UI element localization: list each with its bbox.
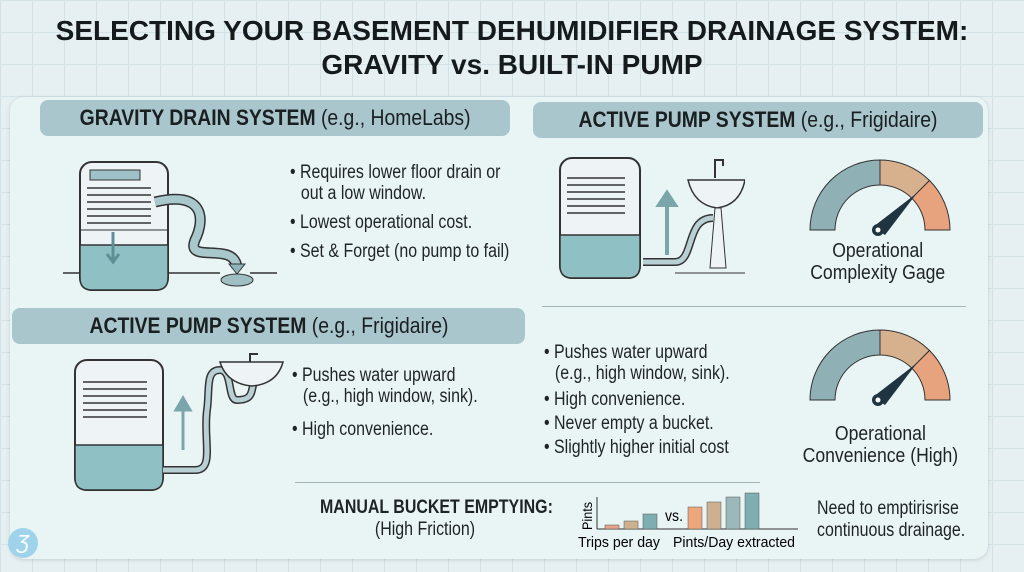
gauge: convenience xyxy=(810,330,950,406)
bullets: active left: • Pushes water upward xyxy=(292,365,455,386)
bullets: active left xyxy=(292,365,478,440)
bullets: active right: (e.g., high window, sink). xyxy=(555,363,730,384)
header: active pump right xyxy=(533,102,983,138)
bar chart: Pints/Day extracted xyxy=(673,534,795,551)
divider bottom xyxy=(295,482,760,483)
bullets: gravity xyxy=(290,162,509,262)
bar chart: vs. xyxy=(665,508,683,525)
header: active pump left: ACTIVE PUMP SYSTEM (e.g., Frigidaire) xyxy=(89,313,448,338)
bar chart xyxy=(578,492,798,551)
caption: complexity gauge xyxy=(810,240,945,284)
header: active pump right: ACTIVE PUMP SYSTEM (e.g., Frigidaire) xyxy=(579,107,937,132)
header: gravity drain xyxy=(40,100,510,136)
title: GRAVITY vs. BUILT-IN PUMP xyxy=(321,49,703,80)
title: SELECTING YOUR BASEMENT DEHUMIDIFIER DRAINAGE SYSTEM: xyxy=(56,15,968,46)
illustration: pump to sink (left) xyxy=(74,353,284,491)
header: gravity drain: GRAVITY DRAIN SYSTEM (e.g., HomeLabs) xyxy=(80,105,470,130)
text: drainage note xyxy=(817,498,965,541)
bullets: gravity: • Requires lower floor drain or out a low window. xyxy=(290,162,500,204)
label: manual bucket emptying: (High Friction) xyxy=(375,519,475,540)
caption: convenience gauge xyxy=(802,423,958,467)
caption: complexity gauge: Operational xyxy=(832,240,923,262)
bullets: active right: • High convenience. xyxy=(544,389,685,410)
bullets: gravity: • Lowest operational cost. xyxy=(290,212,472,233)
text: drainage note: continuous drainage. xyxy=(817,520,965,541)
header: active pump left xyxy=(12,308,525,344)
label: manual bucket emptying: MANUAL BUCKET EMPTYING: xyxy=(320,497,553,518)
gauge: complexity xyxy=(810,160,950,236)
text: drainage note: Need to emptirisrise xyxy=(817,498,959,519)
caption: convenience gauge: Convenience (High) xyxy=(802,445,958,467)
icon: logo xyxy=(8,528,38,558)
caption: convenience gauge: Operational xyxy=(834,423,925,445)
bullets: active right: • Never empty a bucket. xyxy=(544,413,714,434)
divider right xyxy=(542,306,966,307)
illustration: pump to sink (right) xyxy=(559,157,745,279)
bullets: active right: • Slightly higher initial cost xyxy=(544,437,729,458)
icon: logo: Ʒ xyxy=(17,532,29,554)
bar chart: Trips per day xyxy=(578,534,660,551)
bar chart: Pints xyxy=(579,502,595,530)
main panel xyxy=(10,97,988,559)
bullets: active right: • Pushes water upward xyxy=(544,342,707,363)
bullets: active left: • High convenience. xyxy=(292,419,433,440)
title xyxy=(56,15,968,80)
bullets: gravity: • Set & Forget (no pump to fail) xyxy=(290,241,509,262)
label: manual bucket emptying xyxy=(320,497,553,540)
caption: complexity gauge: Complexity Gage xyxy=(810,262,945,284)
bullets: active right xyxy=(544,342,730,458)
illustration: gravity dehumidifier xyxy=(63,161,277,291)
bullets: active left: (e.g., high window, sink). xyxy=(303,386,478,407)
